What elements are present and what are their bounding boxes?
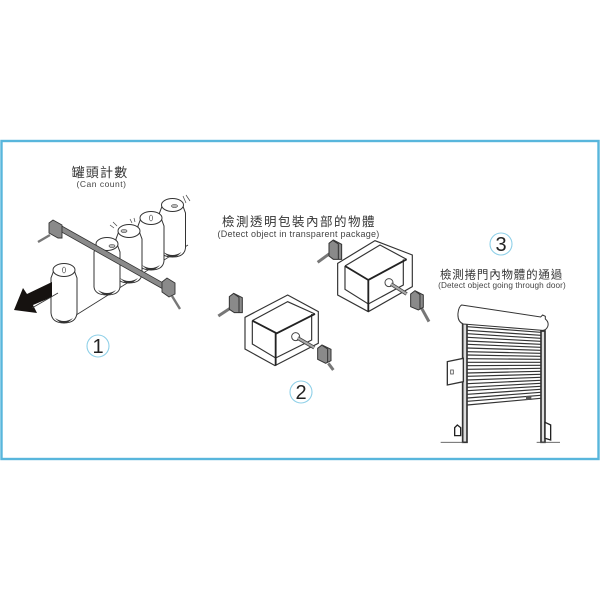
sensor right [411,291,429,322]
number badge 3 [490,233,512,256]
heading: can count: 罐頭計數 [72,165,128,180]
subheading: can count: (Can count) [77,179,126,189]
panel: roller door [438,233,566,442]
side control box [447,358,463,385]
subheading: roller door: (Detect object going through door) [438,281,566,290]
conveyor line [65,245,188,322]
package left [245,295,318,366]
subheading: transparent package: (Detect object in transparent package) [217,229,380,239]
number badge 1 [87,335,109,358]
roll housing [458,305,548,330]
number badge 2 [290,381,312,404]
can 4 [138,212,164,270]
can 2 [94,238,120,295]
sensor top [318,240,342,262]
package right [338,241,412,312]
panel: transparent package [217,214,429,404]
sensor left [218,293,242,316]
panel frame [2,141,598,459]
arrow: can removed [14,282,52,313]
motion line [32,293,58,308]
ground lines [441,441,560,444]
panel: can count [14,165,190,358]
heading: transparent package: 檢測透明包裝內部的物體 [222,214,376,229]
door slats [467,327,541,405]
motion marks [110,195,190,228]
door sensors [455,422,551,440]
roller door illustration [441,305,560,442]
number badge 3: 3 [495,234,507,256]
can 5 [160,198,186,257]
number badge 1: 1 [92,336,104,358]
right sensor [162,278,180,309]
sensor bottom [318,345,333,370]
left sensor [38,220,62,242]
door posts [463,324,545,442]
front can [51,264,77,323]
number badge 2: 2 [295,382,307,404]
detection beam [58,225,165,289]
door handle [526,396,531,400]
heading: roller door: 檢測捲門內物體的通過 [440,268,563,282]
can 3 [116,224,142,283]
